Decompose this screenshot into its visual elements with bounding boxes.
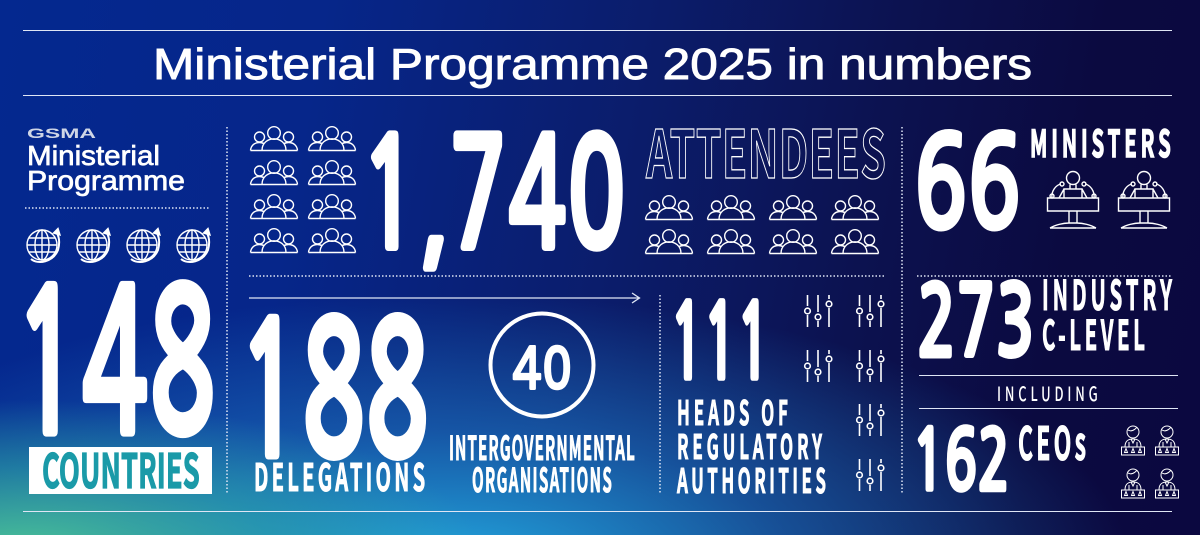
logo: Programme: [27, 165, 185, 196]
panel: delegations: [238, 302, 429, 502]
logo: [27, 125, 185, 196]
icons: sliders: [805, 295, 884, 491]
icons: people left: [250, 127, 356, 252]
label: industry c-level: INDUSTRY: [1042, 263, 1173, 323]
label: heads of regulatory authorities: HEADS OF: [677, 386, 788, 435]
bottom rule: [23, 510, 1172, 512]
badge: 40: 40: [512, 342, 572, 398]
number: 162: 162: [912, 421, 1010, 503]
top rule: [23, 30, 1172, 32]
label: heads of regulatory authorities: [676, 386, 826, 503]
label: intergovernmental: INTERGOVERNMENTAL: [449, 423, 635, 470]
number: 111: 111: [670, 292, 770, 394]
number: 1,740: 1,740: [360, 120, 626, 271]
panel: attendees: [250, 101, 886, 271]
title rule: [23, 94, 1172, 96]
icons: ceo: [1122, 426, 1178, 498]
icons: globes: [27, 228, 210, 262]
number: 188: 188: [238, 302, 429, 484]
label: ministers: MINISTERS: [1030, 114, 1171, 168]
label: organisations: ORGANISATIONS: [472, 455, 612, 502]
panel: intergovernmental organisations: [449, 314, 635, 502]
panel: ministers: [914, 114, 1171, 247]
number: 273: 273: [917, 275, 1035, 371]
title: Ministerial Programme 2025 in numbers: [153, 40, 1032, 89]
panel: industry c-level: [917, 263, 1173, 371]
panel: countries: [14, 125, 216, 503]
label: ceos: CEOs: [1018, 408, 1086, 474]
label: countries: COUNTRIES: [42, 434, 200, 503]
label: attendees outline: ATTENDEES: [645, 101, 886, 197]
number: 148: 148: [14, 268, 216, 463]
label: industry c-level: [1042, 263, 1173, 363]
number: 66: 66: [914, 122, 1021, 247]
label: delegations: DELEGATIONS: [254, 447, 425, 502]
label: including: INCLUDING: [997, 377, 1098, 407]
panel: ceos: [912, 408, 1178, 503]
label: heads of regulatory authorities: REGULATORY: [677, 420, 822, 469]
badge: 40: [490, 314, 594, 416]
panel: regulators: [670, 292, 884, 503]
icons: people right: [646, 196, 878, 254]
label: heads of regulatory authorities: AUTHORITIES: [676, 454, 826, 503]
arrow: [249, 293, 640, 303]
icons: podiums: [1048, 172, 1170, 228]
logo: Ministerial: [27, 140, 160, 171]
label: industry c-level: C-LEVEL: [1042, 303, 1145, 363]
logo: GSMA: [27, 125, 96, 141]
